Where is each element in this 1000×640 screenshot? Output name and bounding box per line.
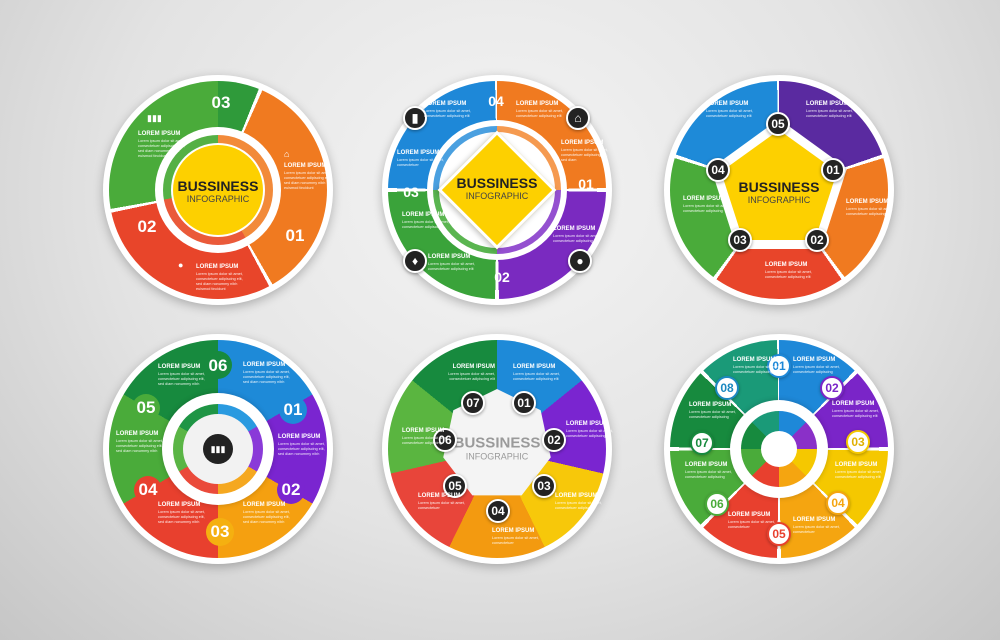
text: Lorem ipsum dolor sit amet, consectetuer adipiscing elit	[516, 109, 563, 118]
panel: circle 2 diamond: INFOGRAPHIC	[466, 191, 528, 201]
text: Lorem ipsum dolor sit amet, consectetuer	[397, 158, 444, 167]
text: circle1 red: Lorem ipsum dolor sit amet, consectetuer adipiscing elit, sed diam nonummy nibh euismod tincidunt	[196, 272, 243, 291]
text: Lorem ipsum dolor sit amet, consectetuer adipiscing elit, sed diam nonummy nibh	[158, 510, 205, 524]
text: ●	[576, 254, 584, 268]
panel: circle 5 heptagon: INFOGRAPHIC	[466, 452, 528, 462]
text: 01	[284, 400, 302, 419]
icon: home: ⌂	[284, 149, 289, 159]
text: LOREM IPSUM	[243, 502, 285, 508]
text: 01	[772, 359, 786, 373]
text: LOREM IPSUM	[402, 428, 444, 434]
text: 01	[578, 176, 594, 192]
text: 07	[466, 396, 480, 410]
text: 08	[720, 381, 734, 395]
text: Lorem ipsum dolor sit amet, consectetuer adipiscing	[685, 470, 732, 479]
icon: chart: ▮▮▮	[147, 113, 162, 123]
text: 03	[403, 184, 419, 200]
text: Lorem ipsum dolor sit amet, consectetuer adipiscing	[555, 501, 602, 510]
text: Lorem ipsum dolor sit amet, consectetuer adipiscing elit, sed diam nonummy nibh	[116, 439, 163, 453]
text: LOREM IPSUM	[561, 140, 603, 146]
text: circle3 blocks: Lorem ipsum dolor sit amet, consectetuer adipiscing elit	[806, 109, 853, 118]
text: 06	[438, 433, 452, 447]
badges circle 2	[403, 106, 427, 130]
text: circle5 blocks	[448, 364, 496, 381]
text: circle5 blocks: Lorem ipsum dolor sit amet, consectetuer adipiscing elit	[448, 372, 495, 381]
text: LOREM IPSUM	[418, 493, 460, 499]
text: LOREM IPSUM	[402, 212, 444, 218]
text: circle2 blocks	[424, 100, 471, 118]
text: 01	[826, 163, 840, 177]
text: 04	[831, 496, 845, 510]
center title: BUSSINESS	[178, 178, 258, 194]
center title: INFOGRAPHIC	[187, 194, 249, 204]
text: circle2 blocks: LOREM IPSUM	[424, 101, 466, 107]
text: LOREM IPSUM	[793, 357, 835, 363]
text: Lorem ipsum dolor sit amet, consectetuer	[492, 536, 539, 545]
text: circle6 blocks: Lorem ipsum dolor sit amet, consectetuer adipiscing	[733, 365, 780, 374]
panel: circle 6 eight segments	[658, 332, 899, 572]
text: Lorem ipsum dolor sit amet, consectetuer adipiscing elit	[428, 262, 475, 271]
text: 02	[494, 269, 510, 285]
text: 06	[209, 356, 227, 375]
text: LOREM IPSUM	[278, 434, 320, 440]
text: circle4 blocks: Lorem ipsum dolor sit amet, consectetuer adipiscing elit, sed diam nonummy nibh	[158, 372, 205, 386]
text: circle6 blocks: LOREM IPSUM	[733, 357, 775, 363]
pentagon	[711, 119, 847, 249]
text: 06	[710, 497, 724, 511]
text: LOREM IPSUM	[513, 364, 555, 370]
panel: circle 5 heptagon	[376, 332, 618, 572]
text: LOREM IPSUM	[683, 196, 725, 202]
text: 02	[547, 433, 561, 447]
text: LOREM IPSUM	[846, 199, 888, 205]
panel: circle 3 pentagon: INFOGRAPHIC	[748, 195, 810, 205]
text: LOREM IPSUM	[689, 402, 731, 408]
text: circle4 blocks	[158, 364, 205, 386]
text: Lorem ipsum dolor sit amet, consectetuer adipiscing	[689, 410, 736, 419]
text: LOREM IPSUM	[793, 517, 835, 523]
text: circle1 green: Lorem ipsum dolor sit amet, consectetuer adipiscing elit, sed diam nonummy nibh euismod tincidunt	[138, 139, 185, 158]
text: Lorem ipsum dolor sit amet, consectetuer adipiscing elit, sed diam nonummy nibh	[243, 370, 290, 384]
text: 03	[211, 522, 229, 541]
text: circle1 orange: Lorem ipsum dolor sit amet, consectetuer adipiscing elit, sed diam nonummy nibh euismod tincidunt	[284, 171, 331, 190]
text: 02	[825, 381, 839, 395]
text: Lorem ipsum dolor sit amet, consectetuer adipiscing elit	[832, 409, 879, 418]
text: 05	[771, 117, 785, 131]
text: circle3 blocks: LOREM IPSUM	[806, 101, 848, 107]
panel: circle 1 three arrows	[98, 72, 338, 314]
text: Lorem ipsum dolor sit amet, consectetuer	[793, 525, 840, 534]
panel: circle 3 pentagon	[658, 72, 899, 314]
panel: circle 2 diamond	[376, 72, 618, 314]
heptagon	[441, 389, 553, 501]
text: LOREM IPSUM	[492, 528, 534, 534]
text: LOREM IPSUM	[516, 101, 558, 107]
text: LOREM IPSUM	[116, 431, 158, 437]
center diamond	[438, 131, 556, 249]
panel: circle 3 pentagon: BUSSINESS	[739, 179, 819, 195]
text: circle1 red: LOREM IPSUM	[196, 264, 238, 270]
text: circle1 green: LOREM IPSUM	[138, 131, 180, 137]
text: 02	[138, 217, 156, 236]
text: circle5 blocks: LOREM IPSUM	[453, 364, 495, 370]
text: circle2 blocks: Lorem ipsum dolor sit amet, consectetuer adipiscing elit	[424, 109, 471, 118]
icon: center chart: ▮▮▮	[211, 444, 225, 454]
text: Lorem ipsum dolor sit amet, consectetuer adipiscing elit, sed diam nonummy nibh	[278, 442, 325, 456]
panel: circle 4 six pieces	[98, 332, 338, 572]
text: Lorem ipsum dolor sit amet, consectetuer adipiscing elit, sed diam nonummy nibh	[243, 510, 290, 524]
text: LOREM IPSUM	[158, 502, 200, 508]
icon: center chart	[203, 434, 233, 464]
text: Lorem ipsum dolor sit amet, consectetuer adipiscing elit	[553, 234, 600, 243]
text: Lorem ipsum dolor sit amet, consectetuer	[728, 520, 775, 529]
text: Lorem ipsum dolor sit amet, consectetuer adipiscing	[793, 365, 840, 374]
text: ⌂	[574, 111, 582, 125]
text: circle1 orange: LOREM IPSUM	[284, 163, 326, 169]
panel: circle 5 heptagon: BUSSINESS	[454, 434, 540, 452]
text: 04	[488, 93, 504, 109]
text: 01	[517, 396, 531, 410]
text: ♦	[412, 254, 418, 268]
text: LOREM IPSUM	[835, 462, 877, 468]
text: circle6 blocks	[733, 356, 780, 374]
text: LOREM IPSUM	[428, 254, 470, 260]
text: 03	[733, 233, 747, 247]
bumps & numbers circle 4	[204, 351, 232, 379]
text: circle4 blocks: LOREM IPSUM	[158, 364, 200, 370]
center title	[178, 178, 258, 204]
text: Lorem ipsum dolor sit amet, consectetuer adipiscing elit	[765, 270, 812, 279]
text: LOREM IPSUM	[555, 493, 597, 499]
text: 04	[711, 163, 725, 177]
text: 03	[851, 435, 865, 449]
text: LOREM IPSUM	[397, 150, 439, 156]
text: Lorem ipsum dolor sit amet, consectetuer adipiscing elit	[706, 109, 753, 118]
panel: circle 2 diamond: BUSSINESS	[457, 175, 537, 191]
text: 01	[286, 226, 304, 245]
icon: person: ●	[178, 260, 183, 270]
text: Lorem ipsum dolor sit amet, consectetuer adipiscing elit	[835, 470, 882, 479]
text: LOREM IPSUM	[765, 262, 807, 268]
text: LOREM IPSUM	[685, 462, 727, 468]
text: Lorem ipsum dolor sit amet, consectetuer adipiscing	[402, 436, 449, 445]
text: 02	[810, 233, 824, 247]
text: Lorem ipsum dolor sit amet, consectetuer	[418, 501, 465, 510]
text: 02	[282, 480, 300, 499]
numbers: 03	[212, 93, 230, 112]
text: 05	[772, 527, 786, 541]
text: LOREM IPSUM	[832, 401, 874, 407]
text: LOREM IPSUM	[243, 362, 285, 368]
text: Lorem ipsum dolor sit amet, consectetuer adipiscing	[683, 204, 730, 213]
text: Lorem ipsum dolor sit amet, consectetuer adipiscing	[846, 207, 893, 216]
text: LOREM IPSUM	[553, 226, 595, 232]
text: Lorem ipsum dolor sit amet, consectetuer adipiscing	[402, 220, 449, 229]
text: 05	[137, 398, 155, 417]
text: Lorem ipsum dolor sit amet, consectetuer adipiscing elit	[513, 372, 560, 381]
text: Lorem ipsum dolor sit amet, consectetuer adipiscing	[566, 429, 613, 438]
text: circle1 green	[138, 130, 185, 158]
text: circle1 red	[196, 264, 243, 291]
text: LOREM IPSUM	[728, 512, 770, 518]
text: 03	[537, 479, 551, 493]
text: 05	[448, 479, 462, 493]
text: circle3 blocks	[806, 100, 853, 118]
text: 04	[139, 480, 157, 499]
text: Lorem ipsum dolor sit amet, consectetuer adipiscing elit, sed diam	[561, 148, 608, 162]
text: LOREM IPSUM	[566, 421, 608, 427]
text: 07	[695, 436, 709, 450]
badges circle 2: ▮	[412, 111, 418, 125]
text: LOREM IPSUM	[706, 101, 748, 107]
text: circle1 orange	[284, 162, 331, 190]
text: 04	[491, 504, 505, 518]
